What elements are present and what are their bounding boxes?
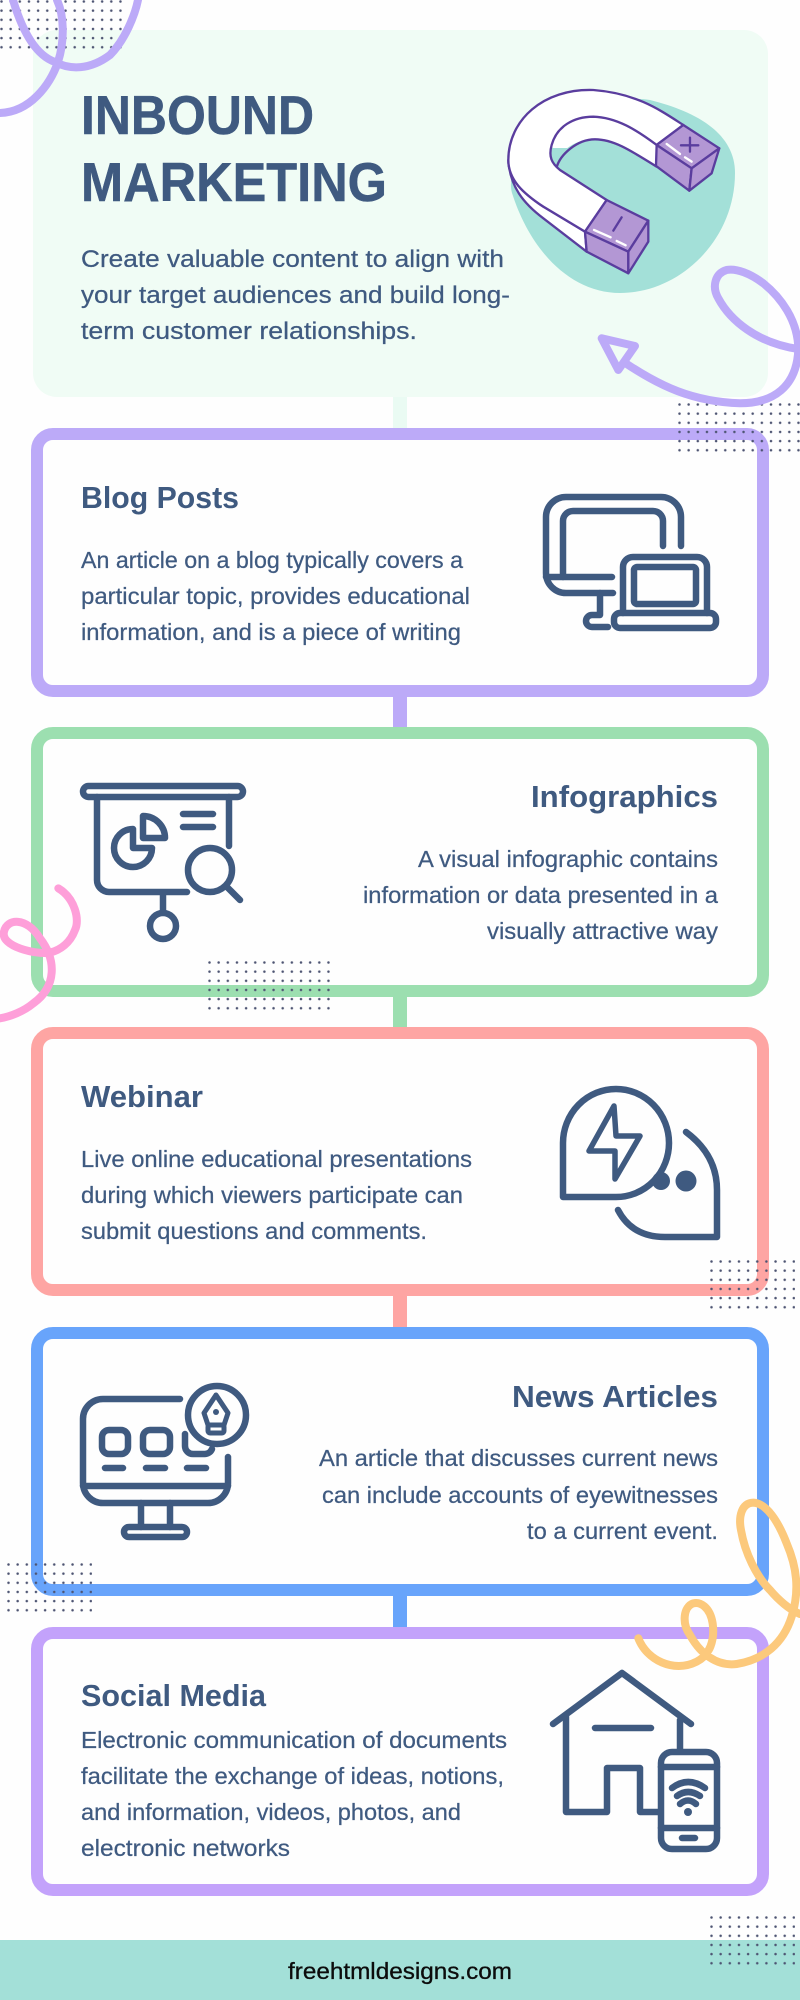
text: blog posts: An article on a blog typically covers a [81,547,464,573]
icon: horseshoe magnet [508,90,735,293]
text: news articles: An article that discusses current news [319,1445,718,1471]
dot pattern: below hero [678,403,800,452]
squiggle: orange [638,1503,800,1666]
title [81,85,387,213]
footer band [0,1940,800,2000]
subtitle: your target audiences and build long- [81,282,510,309]
title: MARKETING [81,152,387,213]
text: social media: Electronic communication of documents [81,1727,507,1753]
title: INBOUND [81,85,314,146]
text: news articles: to a current event. [527,1518,718,1544]
panel: news articles [37,1333,763,1627]
heading: social media: Social Media [81,1679,267,1713]
text: infographics: information or data presented in a [363,882,719,908]
heading: infographics: Infographics [531,780,718,814]
text: blog posts: particular topic, provides educational [81,583,470,609]
text: infographics: visually attractive way [487,918,718,944]
text: social media: and information, videos, photos, and [81,1799,461,1825]
dot pattern: footer corner [710,1916,795,1966]
dot pattern: webinar card [710,1260,795,1310]
arrow: hero purple looped arrow [602,270,800,403]
subtitle: term customer relationships. [81,318,417,345]
footer url: freehtmldesigns.com [288,1958,512,1984]
text: webinar [81,1146,472,1244]
icon: chat bubbles with lightning bolt [563,1089,717,1237]
text: news articles [319,1445,718,1544]
text: webinar: submit questions and comments. [81,1218,427,1244]
icon: house and smartphone with wifi [553,1673,717,1849]
squiggle: top left purple [0,0,138,113]
text: social media: electronic networks [81,1835,290,1861]
panel: social media [37,1633,763,1890]
text: webinar: Live online educational presentations [81,1146,472,1172]
icon: monitor and laptop [546,497,716,628]
icon: presentation board with magnifier [83,786,243,939]
squiggle: pink [0,888,77,1018]
subtitle [81,246,510,345]
text: blog posts: information, and is a piece of writing [81,619,461,645]
dot pattern: news card [7,1563,92,1612]
text: blog posts [81,547,470,645]
heading: blog posts: Blog Posts [81,481,239,515]
subtitle: Create valuable content to align with [81,246,504,273]
text: webinar: during which viewers participate can [81,1182,463,1208]
text: social media: facilitate the exchange of ideas, notions, [81,1763,504,1789]
text: news articles: can include accounts of eyewitnesses [322,1482,718,1508]
text: social media [81,1727,507,1861]
icon: monitor with pen nib [83,1386,246,1537]
heading: news articles: News Articles [512,1380,718,1414]
panel: blog posts [37,434,763,727]
panel: infographics [37,733,763,1027]
text: infographics [363,846,719,944]
heading: webinar: Webinar [81,1080,203,1114]
hero panel [33,30,768,428]
dot pattern: infographics card [208,961,330,1010]
dot pattern: top left [0,0,124,50]
panel: webinar [37,1033,763,1327]
text: infographics: A visual infographic contains [418,846,718,872]
